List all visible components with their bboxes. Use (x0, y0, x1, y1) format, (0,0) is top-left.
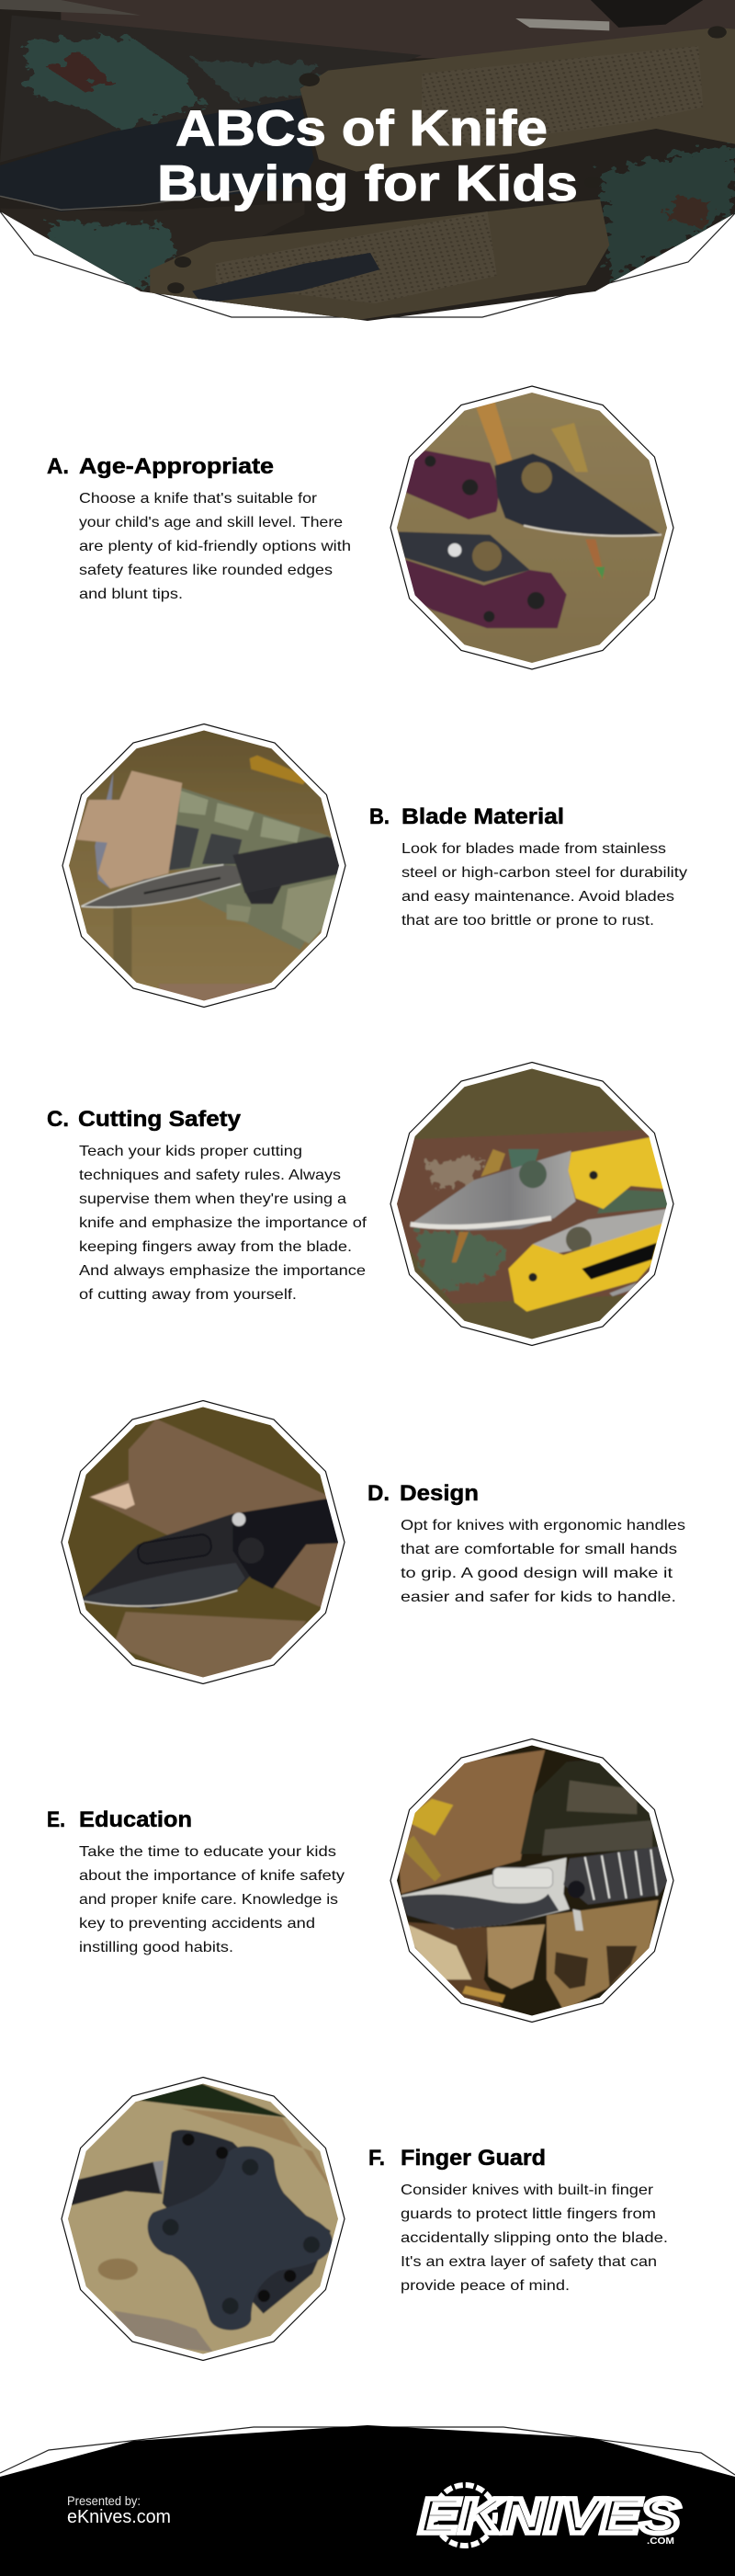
logo: eKnives: EKNIVES (419, 2489, 680, 2544)
section A text (47, 454, 351, 602)
section E text: Education (79, 1807, 192, 1832)
photo E: silver knife on gloves and wood (390, 1738, 674, 2023)
photo D: black drop-point folder on wood (61, 1399, 345, 1684)
section E text (47, 1807, 345, 1955)
section E text: Take the time to educate your kids (79, 1844, 336, 1860)
photo B: damascus dagger on magazine (62, 723, 346, 1008)
presented by: Presented by: (67, 2494, 141, 2508)
section A text: A. (47, 454, 69, 479)
title: ABCs of Knife (175, 99, 548, 156)
footer band (0, 2425, 735, 2576)
photo C: yellow serrated knives (390, 1061, 674, 1346)
section F text: guards to protect little fingers from (401, 2206, 656, 2222)
section D text: that are comfortable for small hands (401, 1542, 677, 1557)
section C text: of cutting away from yourself. (79, 1287, 297, 1303)
section B text: that are too brittle or prone to rust. (401, 913, 654, 929)
section C text: knife and emphasize the importance of (79, 1215, 368, 1231)
photo F: black kydex sheath on canvas (61, 2076, 345, 2361)
presented by (67, 2494, 171, 2527)
section E text: instilling good habits. (79, 1940, 233, 1955)
section C text: supervise them when they're using a (79, 1191, 346, 1207)
section F text: F. (368, 2146, 385, 2171)
section D text: to grip. A good design will make it (401, 1566, 673, 1581)
section D text: easier and safer for kids to handle. (401, 1590, 676, 1605)
section E text: and proper knife care. Knowledge is (79, 1892, 338, 1908)
section D text: D. (368, 1481, 390, 1506)
section A text: Choose a knife that's suitable for (79, 491, 318, 507)
section F text: It's an extra layer of safety that can (401, 2254, 657, 2270)
section C text (47, 1107, 368, 1303)
section D text: Design (400, 1481, 479, 1506)
section C text: Teach your kids proper cutting (79, 1144, 302, 1159)
section E text: E. (47, 1807, 65, 1832)
section C text: Cutting Safety (78, 1107, 242, 1132)
section F text: Consider knives with built-in finger (401, 2183, 654, 2198)
section F text: provide peace of mind. (401, 2278, 570, 2294)
section A text: Age-Appropriate (79, 454, 274, 479)
section B text: B. (369, 804, 390, 829)
section C text: And always emphasize the importance (79, 1263, 366, 1279)
section E text: key to preventing accidents and (79, 1916, 315, 1932)
section F text (368, 2146, 668, 2294)
section E text: about the importance of knife safety (79, 1868, 345, 1884)
section F text: accidentally slipping onto the blade. (401, 2230, 668, 2246)
section C text: C. (47, 1107, 69, 1132)
section C text: techniques and safety rules. Always (79, 1168, 341, 1183)
title: Buying for Kids (157, 154, 578, 211)
section B text (369, 804, 687, 929)
title (157, 99, 578, 211)
section B text: Look for blades made from stainless (401, 841, 666, 857)
section A text: and blunt tips. (79, 587, 183, 602)
section B text: steel or high-carbon steel for durability (401, 865, 687, 881)
header banner (0, 0, 735, 325)
section B text: Blade Material (401, 804, 564, 829)
section D text: Opt for knives with ergonomic handles (401, 1518, 685, 1533)
section B text: and easy maintenance. Avoid blades (401, 889, 674, 905)
section A text: are plenty of kid-friendly options with (79, 539, 351, 554)
section A text: safety features like rounded edges (79, 563, 333, 578)
section F text: Finger Guard (401, 2146, 546, 2171)
header photo: two tan knives on rusted panel (0, 0, 735, 325)
logo: eKnives: .COM (647, 2536, 674, 2547)
photo A: purple folding knives (390, 385, 674, 670)
presented by: eKnives.com (67, 2507, 171, 2527)
section A text: your child's age and skill level. There (79, 515, 343, 530)
section D text (368, 1481, 685, 1605)
section C text: keeping fingers away from the blade. (79, 1239, 352, 1255)
